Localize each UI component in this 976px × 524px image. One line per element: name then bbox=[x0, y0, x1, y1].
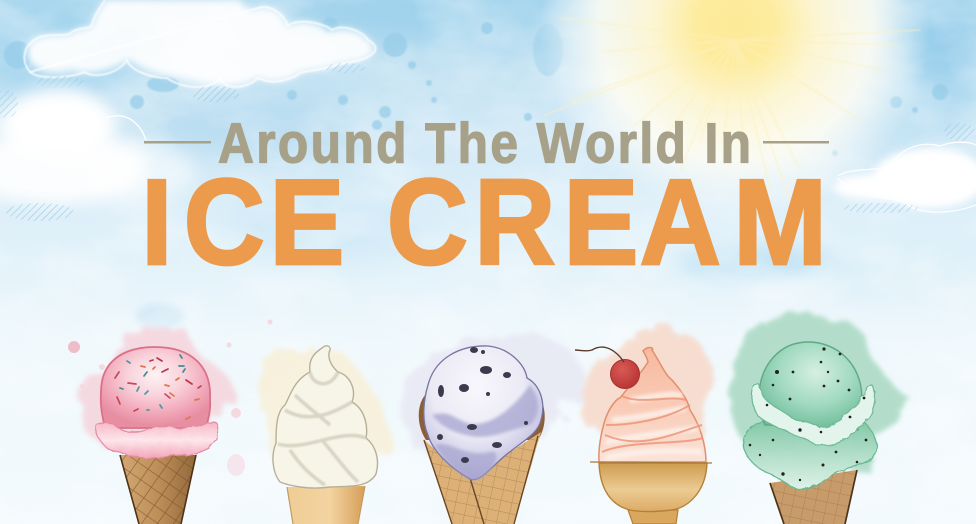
scoop skirt bbox=[96, 422, 218, 458]
sun with rays bbox=[540, 0, 930, 230]
cloud: right bbox=[834, 123, 976, 213]
left rule bbox=[144, 141, 211, 144]
ice cream 2: vanilla soft serve bbox=[259, 346, 392, 524]
swirl shading bbox=[278, 372, 366, 485]
scoop lower shading bbox=[435, 444, 496, 480]
cone bbox=[120, 455, 196, 524]
middle skirt bbox=[752, 384, 875, 446]
ice cream 1: pink with sprinkles bbox=[68, 320, 272, 524]
lilac watercolor splash bbox=[402, 335, 582, 455]
cup stem bbox=[628, 510, 678, 524]
lower scoop bbox=[743, 418, 877, 490]
cup bbox=[599, 463, 707, 512]
back of cone bbox=[419, 385, 545, 440]
cookie chunks bbox=[437, 347, 528, 463]
subtitle text: Around The World In bbox=[218, 113, 751, 175]
cream watercolor splash bbox=[259, 347, 392, 470]
waffle cone bbox=[770, 470, 857, 524]
peach watercolor splash bbox=[576, 329, 713, 440]
pink watercolor splash bbox=[68, 320, 272, 476]
upper scoop bbox=[759, 342, 862, 430]
cherry bbox=[575, 347, 640, 388]
scoop lavender band bbox=[432, 385, 538, 437]
waffle cone bbox=[424, 432, 541, 524]
swirl bbox=[599, 347, 706, 462]
right rule bbox=[763, 141, 829, 144]
ice cream 5: mint chip bbox=[726, 313, 912, 524]
chocolate flecks bbox=[749, 347, 867, 481]
sprinkles bbox=[115, 355, 201, 419]
wafer cone bbox=[287, 486, 365, 524]
ice cream 4: peach swirl with cherry bbox=[575, 329, 713, 524]
cup rim bbox=[590, 462, 712, 463]
paint splatters bbox=[4, 17, 948, 156]
ice cream 3: blueberry cookie bbox=[402, 335, 582, 524]
swirl bands bbox=[602, 396, 703, 452]
main title: ICE CREAM: ICE CREAM bbox=[141, 153, 827, 290]
swirl highlights bbox=[606, 395, 702, 458]
scoop bbox=[424, 346, 543, 480]
cloud: middle left bbox=[0, 89, 195, 221]
green watercolor splash bbox=[726, 313, 912, 470]
scoop bbox=[101, 347, 210, 428]
swirl bbox=[273, 346, 378, 488]
cloud: top left bbox=[24, 0, 375, 102]
